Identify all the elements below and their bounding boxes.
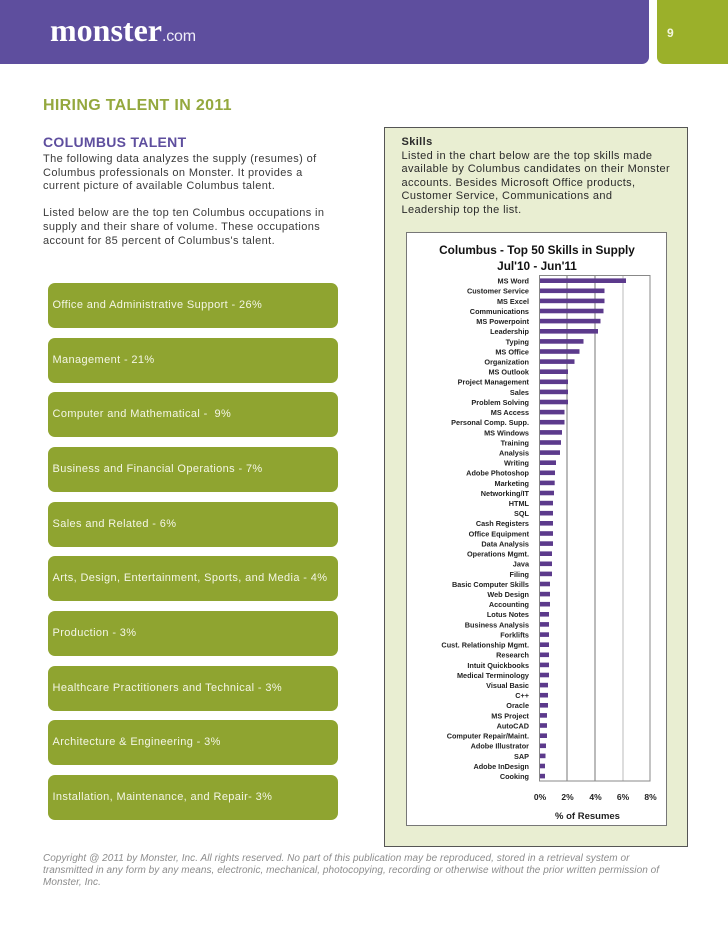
bar: installation: Installation, Maintenance, and Repair- 3% (52, 791, 272, 803)
chart title (439, 243, 635, 273)
section heading: COLUMBUS TALENT (43, 134, 186, 150)
skill labels: Organization (484, 358, 529, 366)
skill labels: Medical Terminology (457, 671, 530, 680)
skill labels: Basic Computer Skills (452, 580, 529, 589)
skills text (402, 136, 670, 216)
skill labels: Computer Repair/Maint. (447, 732, 529, 741)
intro text (43, 153, 324, 247)
x axis labels: 0% (534, 792, 547, 802)
skill labels: Research (496, 651, 529, 660)
skill labels: Data Analysis (481, 540, 529, 548)
intro text: supply and their share of volume. These occupations (43, 221, 320, 233)
bar: arts and media: Arts, Design, Entertainment, Sports, and Media - 4% (52, 572, 327, 584)
skill labels: Accounting (489, 600, 529, 609)
bar: production (48, 611, 338, 656)
x axis labels: 4% (589, 792, 602, 802)
bar: business and financial: Business and Financial Operations - 7% (52, 463, 263, 475)
panel: skills (384, 127, 688, 847)
skill labels: HTML (509, 499, 530, 508)
skill labels: MS Windows (484, 428, 529, 437)
skill labels: Web Design (487, 590, 529, 599)
bar: production: Production - 3% (52, 627, 136, 639)
bar: architecture: Architecture & Engineering - 3% (52, 736, 221, 748)
skill labels: MS Powerpoint (476, 317, 530, 326)
skill labels: SAP (514, 752, 529, 761)
skill labels: Operations Mgmt. (467, 550, 529, 559)
skill labels: MS Excel (497, 297, 529, 306)
x axis title: % of Resumes (555, 811, 620, 822)
skill labels: Leadership (490, 327, 530, 336)
skill labels: Forklifts (500, 630, 529, 640)
skill labels: Customer Service (467, 287, 529, 296)
intro text: account for 85 percent of Columbus's talent. (43, 235, 275, 247)
bar: architecture (48, 720, 338, 765)
skill labels: Visual Basic (486, 681, 529, 690)
skill labels: Communications (470, 307, 529, 316)
x axis labels: 6% (617, 792, 630, 802)
skill labels: SQL (514, 509, 530, 518)
x axis labels: 2% (561, 792, 574, 802)
bar: office and administrative support (48, 283, 338, 328)
skill labels: Training (501, 438, 529, 447)
intro text: current picture of available Columbus talent. (43, 180, 275, 192)
skill labels: Typing (506, 337, 529, 346)
skill labels (441, 277, 530, 781)
x axis labels: 8% (644, 792, 657, 802)
header band (0, 0, 649, 64)
skill labels: AutoCAD (497, 721, 529, 730)
skill labels: Filing (510, 570, 529, 579)
skill labels: Personal Comp. Supp. (451, 418, 529, 427)
bar: sales (48, 502, 338, 547)
bar: healthcare: Healthcare Practitioners and Technical - 3% (52, 682, 282, 694)
bar: office and administrative support: Office and Administrative Support - 26% (52, 299, 262, 311)
skill labels: Intuit Quickbooks (467, 661, 529, 670)
skills text: Listed in the chart below are the top skills made (402, 150, 652, 162)
skill labels: Adobe Illustrator (471, 742, 529, 751)
bar: installation (48, 775, 338, 820)
x axis labels (534, 792, 657, 802)
skill labels: Cooking (500, 772, 529, 781)
skill labels: Networking/IT (481, 489, 530, 498)
bar: business and financial (48, 447, 338, 492)
skill labels: Adobe Photoshop (466, 469, 530, 478)
skill labels: C++ (515, 691, 529, 700)
bar: computer and mathematical (48, 392, 338, 437)
page heading: HIRING TALENT IN 2011 (43, 97, 232, 114)
bar: computer and mathematical: Computer and Mathematical - 9% (52, 408, 231, 420)
chart title: Jul'10 - Jun'11 (497, 259, 577, 273)
skills text: Leadership top the list. (402, 204, 522, 216)
bar: management (48, 338, 338, 383)
skill labels: MS Outlook (488, 368, 530, 377)
skill labels: MS Office (495, 347, 529, 356)
skills text: available by Columbus candidates on their Monster (402, 163, 670, 175)
skill labels: Lotus Notes (487, 610, 529, 619)
copyright footer: transmitted in any form by any means, electronic, mechanical, photocopying, recording or otherwise without the prior written permission of (43, 865, 659, 876)
intro text: The following data analyzes the supply (resumes) of (43, 153, 317, 165)
skill labels: Adobe InDesign (473, 762, 529, 771)
bar: sales: Sales and Related - 6% (52, 518, 176, 530)
plot frame and grid (540, 275, 650, 781)
skill labels: Cust. Relationship Mgmt. (441, 641, 529, 650)
intro text: Columbus professionals on Monster. It provides a (43, 167, 303, 179)
intro text: Listed below are the top ten Columbus occupations in (43, 207, 324, 219)
skill labels: Business Analysis (465, 620, 529, 629)
skill labels: Writing (504, 459, 529, 468)
chart title: Columbus - Top 50 Skills in Supply (439, 243, 635, 257)
copyright footer (43, 853, 660, 888)
bar: arts and media (48, 556, 338, 601)
skill labels: MS Project (491, 711, 530, 720)
skill labels: Marketing (495, 479, 529, 488)
skills text: Customer Service, Communications and (402, 190, 612, 202)
skills text: Skills (402, 136, 433, 148)
occupation list (48, 283, 338, 820)
skill labels: Java (513, 560, 530, 569)
copyright footer: Monster, Inc. (43, 877, 101, 888)
logo: monster.com: monster.com (50, 12, 196, 48)
skill labels: Cash Registers (476, 519, 529, 528)
skill labels: Project Management (458, 378, 530, 387)
skill labels: Problem Solving (471, 398, 529, 407)
bar: healthcare (48, 666, 338, 711)
skill labels: Office Equipment (469, 529, 530, 538)
skill labels: Analysis (499, 448, 529, 458)
bars (540, 278, 626, 778)
skill labels: MS Word (498, 277, 529, 286)
skill labels: Oracle (506, 701, 529, 710)
page number tab: 9 (667, 26, 674, 40)
skill labels: Sales (510, 388, 529, 397)
bar: management: Management - 21% (52, 354, 155, 366)
skill labels: MS Access (491, 408, 529, 417)
page number tab (657, 0, 728, 64)
copyright footer: Copyright @ 2011 by Monster, Inc. All rights reserved. No part of this publication may be reproduced, stored in a retrieval system or (43, 853, 630, 864)
skills text: accounts. Besides Microsoft Office products, (402, 177, 636, 189)
